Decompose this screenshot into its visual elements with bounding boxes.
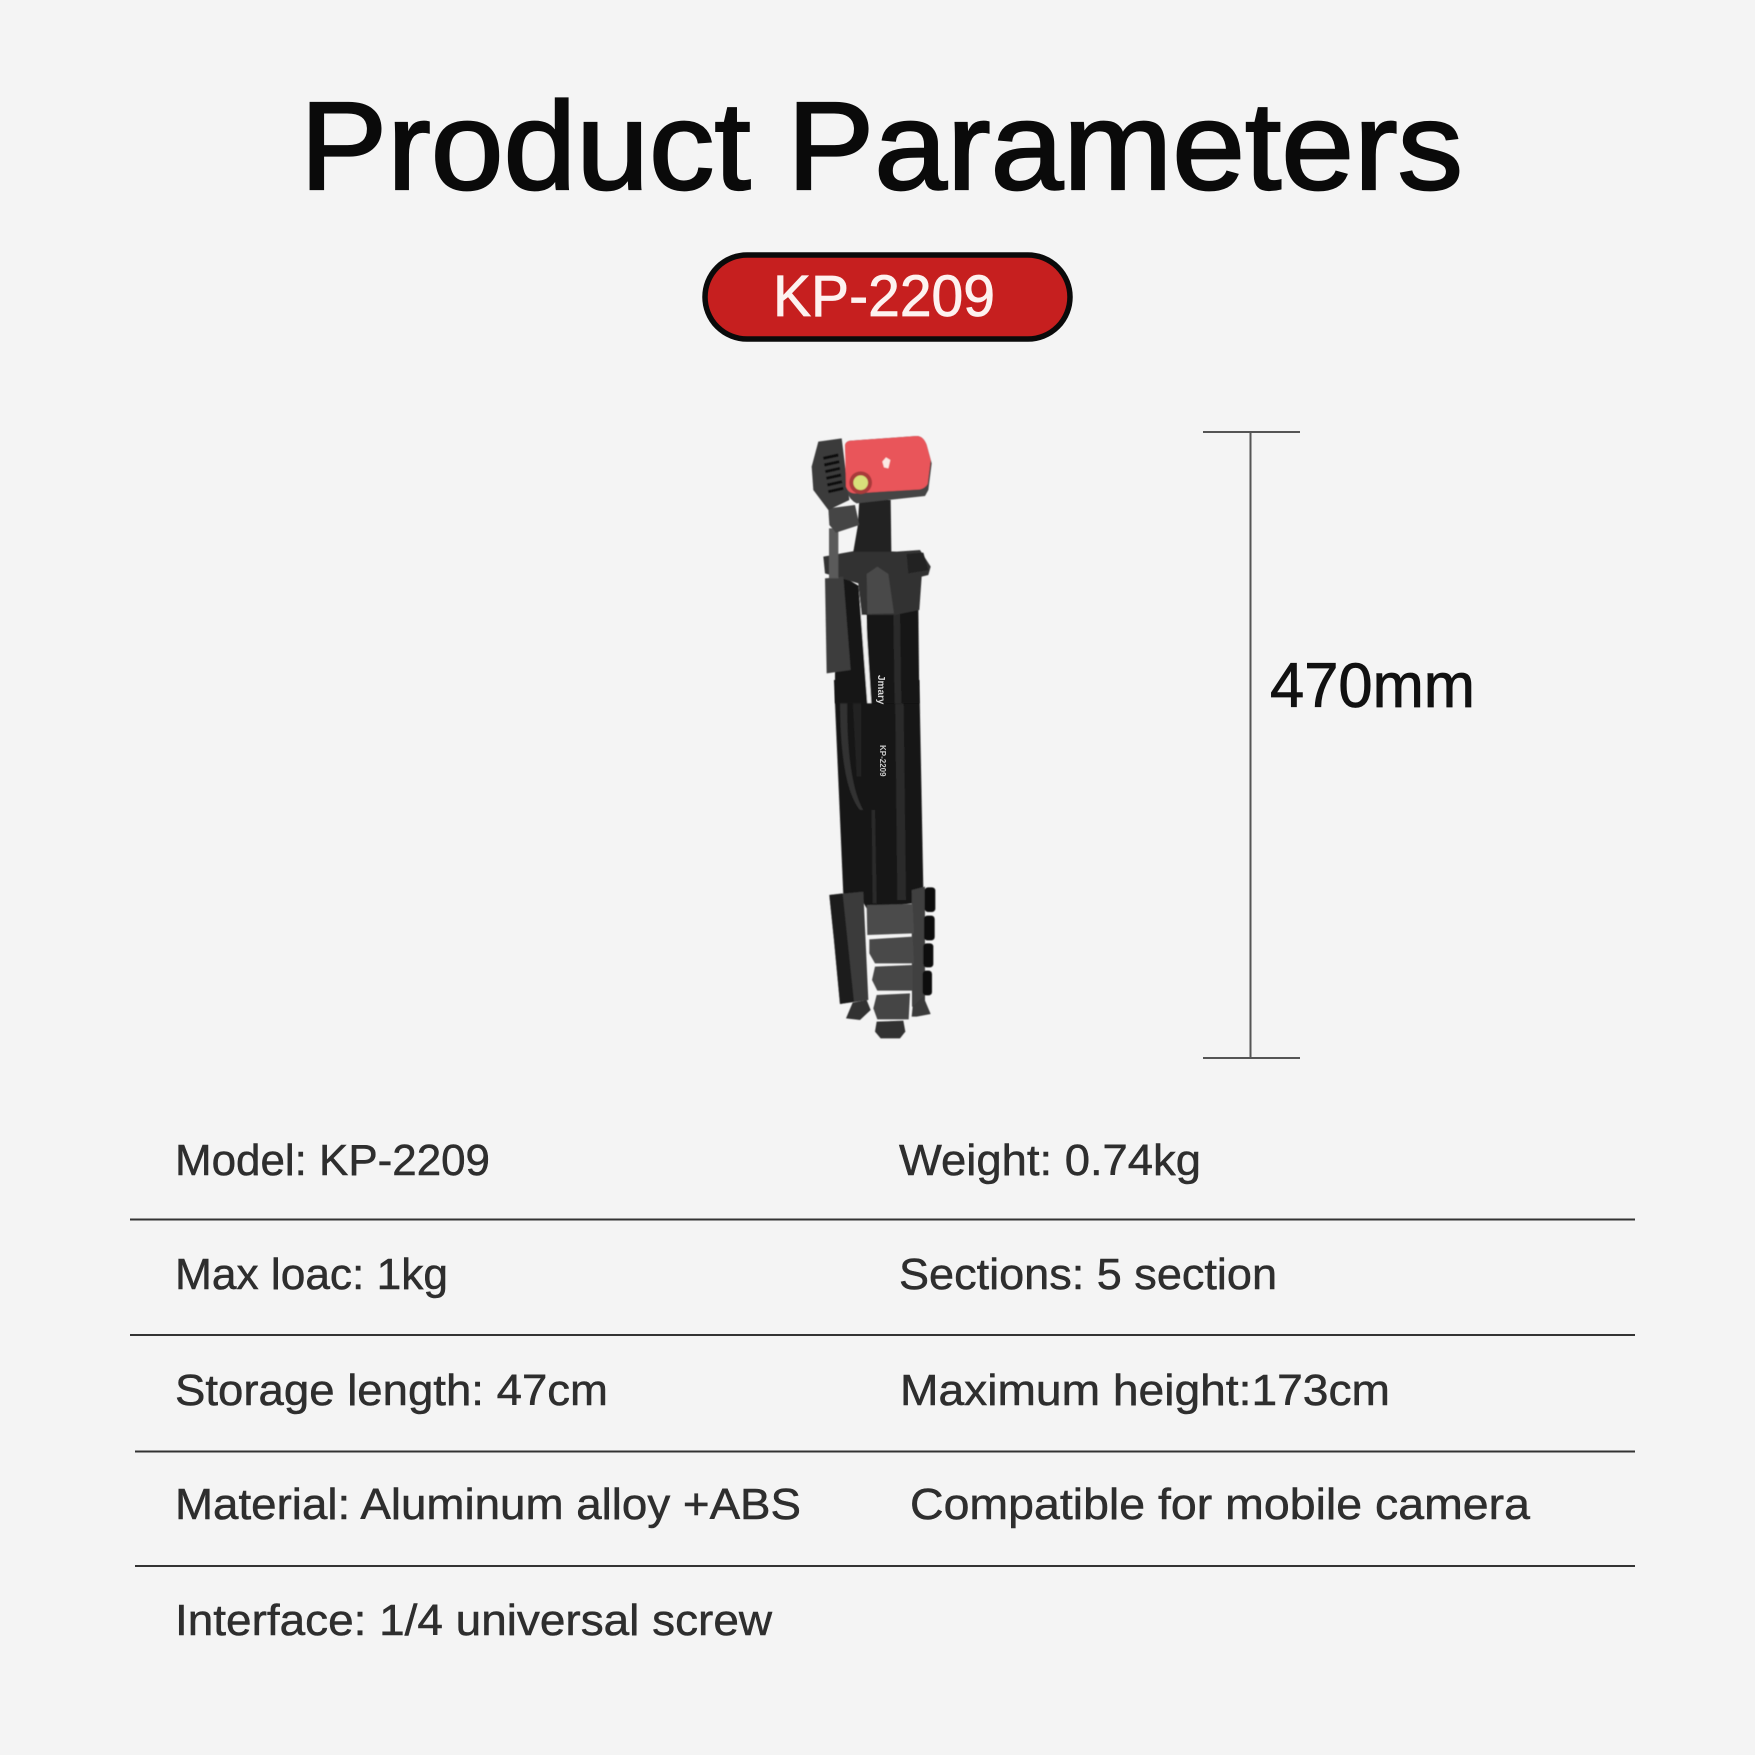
spec: interface: Interface: 1/4 universal screw xyxy=(175,1596,772,1645)
tripod brand label: Jmary xyxy=(875,675,886,705)
tripod model label: KP-2209 xyxy=(878,745,887,777)
spec: maximum height: Maximum height:173cm xyxy=(900,1366,1390,1415)
model badge: KP-2209 xyxy=(773,264,995,329)
tripod lower section: legs and clamps xyxy=(829,680,935,1038)
spec: compatibility: Compatible for mobile camera xyxy=(910,1480,1531,1529)
tripod upper section: plate, head and upper legs xyxy=(812,436,932,703)
model badge xyxy=(705,255,1070,339)
tripod product photo xyxy=(812,436,935,1038)
spec: max load: Max loac: 1kg xyxy=(175,1250,448,1299)
height label: 470mm xyxy=(1270,651,1475,721)
spec: storage length: Storage length: 47cm xyxy=(175,1366,608,1415)
spec: material: Material: Aluminum alloy +ABS xyxy=(175,1480,801,1529)
spec: sections: Sections: 5 section xyxy=(899,1250,1277,1299)
specification table xyxy=(130,1136,1635,1645)
spec: weight: Weight: 0.74kg xyxy=(899,1136,1201,1185)
spec: model: Model: KP-2209 xyxy=(175,1136,490,1185)
height dimension marker xyxy=(1203,432,1300,1058)
title: Product Parameters xyxy=(300,77,1463,216)
